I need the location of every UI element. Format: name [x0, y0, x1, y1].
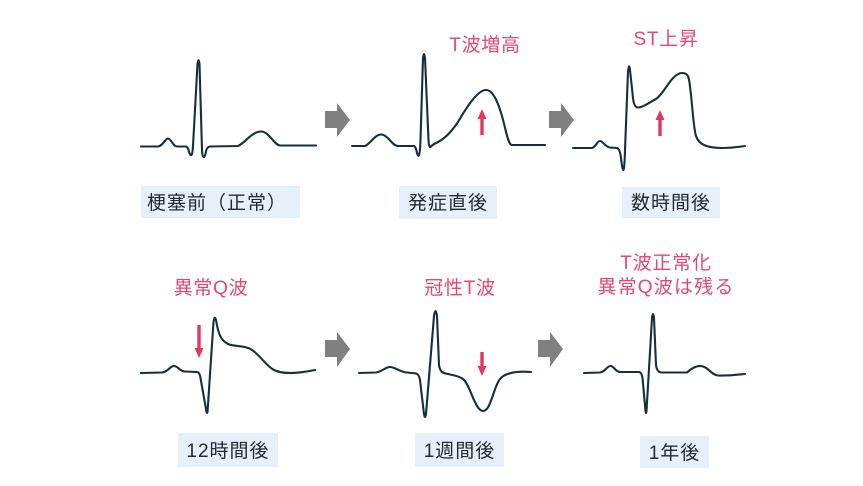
panel: immediately after onset — [352, 34, 545, 219]
panel: before infarction — [141, 60, 316, 218]
panel: 1 week after — [359, 277, 531, 467]
panel: 12 hours after — [141, 277, 315, 467]
label: 1週間後 — [415, 433, 504, 467]
label: 12時間後 — [178, 433, 278, 467]
panel: several hours after — [573, 28, 745, 218]
annotation: T波正常化 / 異常Q波は残る: T波正常化 — [620, 252, 712, 274]
arrow: T wave rises — [478, 109, 486, 135]
annotation: T波正常化 / 異常Q波は残る — [597, 252, 735, 298]
arrow: step 4 to 5 — [325, 332, 350, 367]
label: 発症直後 — [399, 186, 497, 219]
ECG trace: normal — [141, 60, 316, 157]
annotation: 異常Q波: 異常Q波 — [174, 277, 248, 299]
arrow: step 2 to 3 — [549, 103, 574, 137]
label: 数時間後 — [622, 187, 720, 218]
label: 梗塞前(正常) — [141, 186, 300, 218]
arrow: ST rises — [656, 110, 664, 136]
label: 12時間後: 12時間後 — [186, 440, 270, 462]
ECG trace: ST elevation — [573, 66, 745, 170]
arrow: Q wave deepens — [194, 325, 204, 358]
annotation: T波増高: T波増高 — [449, 34, 521, 56]
label: 1年後: 1年後 — [649, 442, 700, 464]
ECG trace: hyperacute T wave — [352, 54, 545, 156]
arrow: step 1 to 2 — [325, 103, 350, 137]
ECG trace: T normalised, Q remains — [584, 314, 745, 413]
annotation: 冠性T波: 冠性T波 — [424, 277, 496, 299]
annotation: ST上昇: ST上昇 — [633, 28, 699, 50]
arrow: step 5 to 6 — [538, 332, 563, 367]
label: 発症直後: 発症直後 — [408, 192, 488, 214]
ECG trace: abnormal Q wave — [141, 318, 315, 413]
label: 1週間後: 1週間後 — [424, 440, 495, 462]
panel: 1 year after — [584, 252, 745, 468]
annotation: T波正常化 / 異常Q波は残る: 異常Q波は残る — [597, 276, 735, 298]
label: 梗塞前(正常): 梗塞前（正常） — [147, 192, 287, 214]
arrow: T wave inverts — [478, 352, 486, 376]
label: 1年後 — [640, 436, 709, 468]
label: 数時間後: 数時間後 — [631, 192, 711, 214]
ECG trace: coronary T wave — [359, 311, 531, 417]
